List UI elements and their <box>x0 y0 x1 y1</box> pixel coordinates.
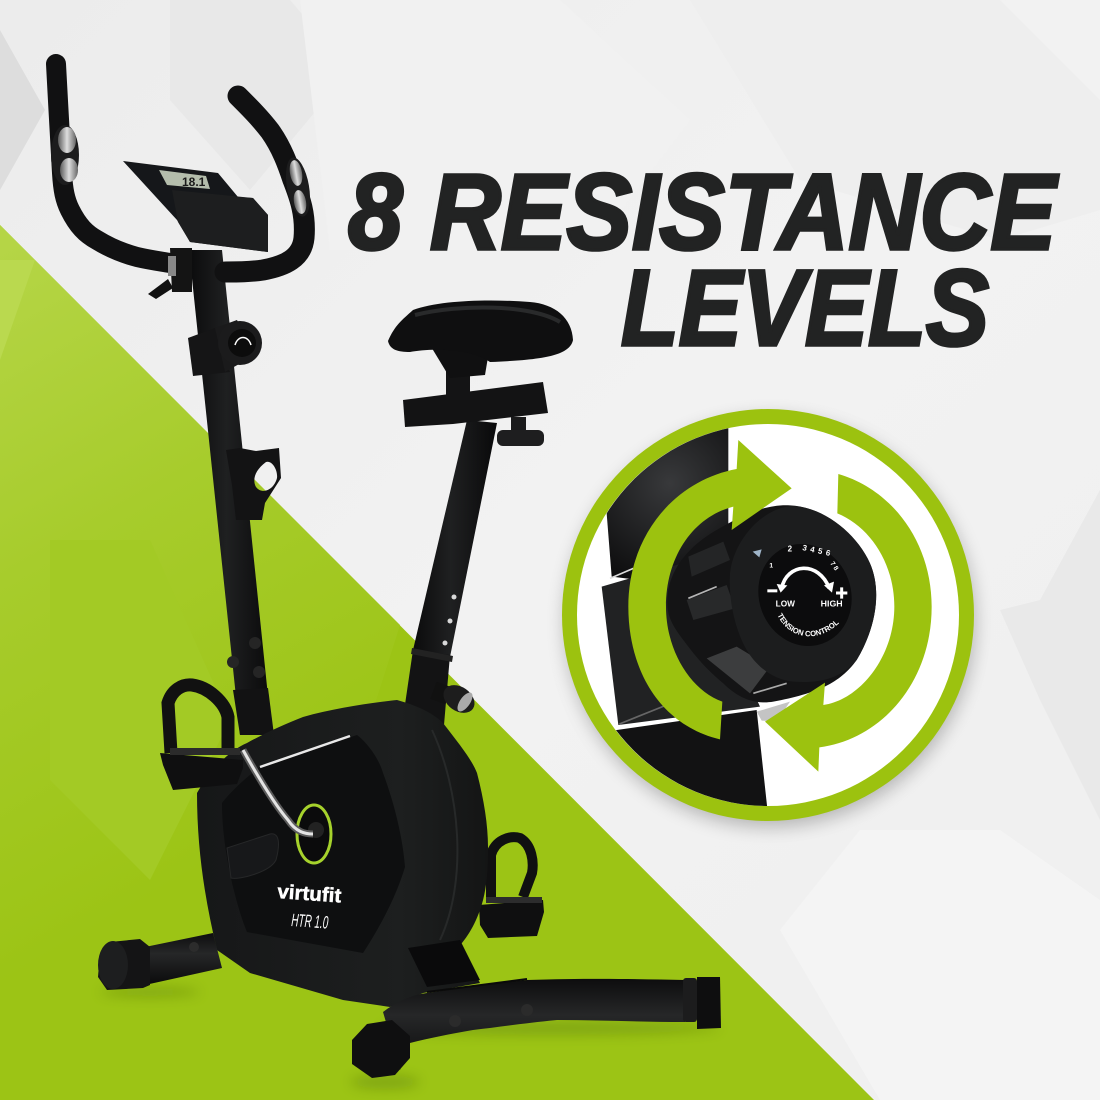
rear pedal <box>479 837 544 938</box>
small tension knob <box>188 320 262 376</box>
title: LEVELS <box>621 247 989 368</box>
brand label <box>277 881 342 933</box>
crank arm <box>243 750 313 834</box>
bottle holder <box>226 448 281 520</box>
handlebar pulse grips <box>51 125 314 218</box>
knob: TENSION CONTROL <box>778 612 840 636</box>
handlebar clamp <box>148 248 192 299</box>
upright tube photo <box>602 428 790 806</box>
handlebar <box>56 64 304 272</box>
exercise bike <box>51 64 721 1089</box>
green diagonal panel <box>0 225 874 1100</box>
flywheel housing <box>197 700 488 1007</box>
main upright tube <box>189 250 274 735</box>
seat post <box>402 420 497 725</box>
front stabilizer foot <box>98 933 222 990</box>
brand label: HTR 1.0 <box>291 910 329 933</box>
console: 18.1 <box>182 175 206 189</box>
crank hub <box>297 805 331 863</box>
knob: LOW <box>776 599 795 609</box>
knob <box>668 505 876 702</box>
post lock knob <box>430 679 480 719</box>
rear stabilizer foot <box>352 977 721 1078</box>
title <box>348 151 1059 368</box>
knob: 3 4 5 6 <box>802 543 832 558</box>
floor shadows <box>100 987 720 1089</box>
detail circle: tension knob close-up <box>556 408 984 836</box>
front pedal <box>160 685 243 790</box>
rotation arrows <box>628 440 932 772</box>
saddle <box>388 301 573 362</box>
knob: 7 8 <box>828 560 840 572</box>
upright adjustment holes <box>227 637 265 678</box>
brand label: virtufit <box>277 881 342 907</box>
seat clamp <box>403 345 548 446</box>
knob: HIGH <box>821 599 843 609</box>
knob: 2 <box>788 545 793 554</box>
knob: 1 <box>769 563 773 570</box>
console <box>123 161 268 252</box>
seat post holes <box>442 594 456 646</box>
